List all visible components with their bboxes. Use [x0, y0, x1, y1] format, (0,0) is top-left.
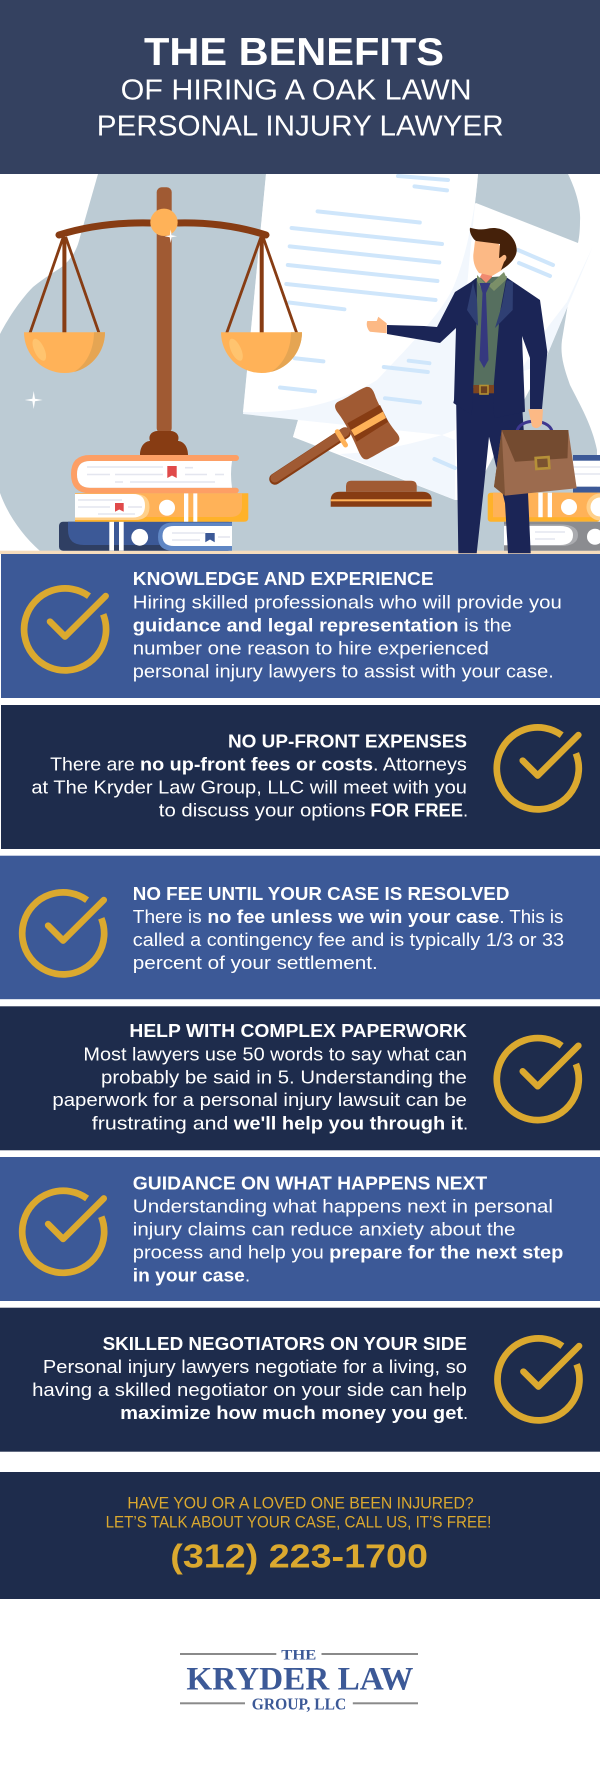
body text: process and help you	[133, 1241, 324, 1262]
stack of books, right	[488, 455, 600, 551]
body text	[52, 1043, 468, 1133]
heading: NO UP-FRONT EXPENSES	[228, 730, 467, 751]
body text	[31, 753, 468, 820]
illustration: lawyer, scales, gavel and books	[0, 174, 600, 554]
body text: no fee unless we win your case	[207, 906, 499, 927]
title: PERSONAL INJURY LAWYER	[97, 111, 504, 143]
outstretched hand	[367, 317, 387, 333]
stack of books, left	[59, 455, 248, 551]
body text	[32, 1356, 468, 1423]
body text: Most lawyers use 50 words to say what can	[83, 1043, 467, 1064]
heading: KNOWLEDGE AND EXPERIENCE	[133, 568, 434, 589]
header banner	[0, 0, 600, 174]
jacket	[387, 277, 547, 418]
body text: having a skilled negotiator on your side can help	[32, 1379, 467, 1400]
lawyer figure	[367, 228, 577, 553]
sparkles	[25, 230, 177, 409]
body text: .	[245, 1264, 250, 1285]
body text: injury claims can reduce anxiety about the	[133, 1218, 516, 1239]
logo: The Kryder Law Group, LLC	[180, 1647, 418, 1713]
panel: help with complex paperwork	[0, 1006, 600, 1150]
body text: There is	[133, 906, 202, 927]
middle orange book	[75, 493, 248, 522]
body text: FOR FREE	[370, 799, 463, 820]
body text: percent of your settlement.	[133, 952, 378, 973]
icon: check circle	[22, 892, 104, 974]
panel: knowledge and experience	[1, 554, 600, 698]
body text: Personal injury lawyers negotiate for a living, so	[43, 1356, 467, 1377]
body text: guidance and legal representation	[133, 614, 459, 635]
body text	[133, 1195, 563, 1285]
panel: no fee until resolved	[0, 856, 600, 999]
body text: paperwork for a personal injury lawsuit can be	[52, 1089, 467, 1110]
heading: SKILLED NEGOTIATORS ON YOUR SIDE	[103, 1333, 467, 1354]
front document	[243, 174, 478, 435]
document text lines	[280, 176, 553, 468]
icon: check circle	[24, 588, 106, 670]
body text: . This is	[499, 906, 563, 927]
face and neck	[480, 268, 492, 283]
body text: probably be said in 5. Understanding the	[101, 1066, 467, 1087]
body text: maximize how much money you get	[120, 1402, 463, 1423]
body text: personal injury lawyers to assist with your case.	[133, 660, 554, 681]
phone number: (312) 223-1700	[170, 1537, 428, 1574]
body text: There are	[50, 753, 135, 774]
call to action text: LET’S TALK ABOUT YOUR CASE, CALL US, IT’S FREE!	[106, 1513, 491, 1531]
title	[97, 31, 504, 143]
heading: HELP WITH COMPLEX PAPERWORK	[129, 1020, 468, 1041]
body text: Hiring skilled professionals who will provide you	[133, 591, 562, 612]
body text: .	[463, 799, 468, 820]
body text: prepare for the next step	[329, 1241, 563, 1262]
trousers	[456, 390, 531, 553]
logo: The Kryder Law Group, LLC: GROUP, LLC	[252, 1694, 346, 1713]
bottom blue book	[59, 522, 232, 551]
background blob	[0, 174, 597, 551]
top orange-cover book	[71, 455, 239, 493]
floor line	[0, 551, 600, 554]
call to action banner	[0, 1472, 600, 1599]
shirt	[473, 276, 507, 388]
body text: at The Kryder Law Group, LLC will meet with you	[31, 776, 467, 797]
call to action text	[106, 1494, 491, 1531]
body text: called a contingency fee and is typically 1/3 or 33	[133, 929, 564, 950]
gavel	[275, 387, 432, 507]
body text: in your case	[133, 1264, 245, 1285]
sound block	[331, 481, 432, 507]
heading: GUIDANCE ON WHAT HAPPENS NEXT	[133, 1172, 488, 1193]
back document	[293, 203, 593, 500]
body text	[133, 906, 564, 973]
scales of justice	[24, 187, 302, 455]
body text: . Attorneys	[373, 753, 467, 774]
collar	[477, 272, 507, 291]
body text: is the	[464, 614, 512, 635]
call to action text: HAVE YOU OR A LOVED ONE BEEN INJURED?	[127, 1494, 474, 1512]
body text: Understanding what happens next in personal	[133, 1195, 553, 1216]
logo: The Kryder Law Group, LLC: THE	[281, 1647, 316, 1663]
icon: check circle	[497, 1038, 579, 1120]
belt	[473, 385, 494, 393]
hair	[470, 228, 517, 270]
briefcase	[494, 409, 577, 496]
title: OF HIRING A OAK LAWN	[121, 74, 472, 106]
body text: number one reason to hire experienced	[133, 637, 489, 658]
panel: skilled negotiators	[0, 1308, 600, 1452]
body text: to discuss your options	[159, 799, 366, 820]
body text: we'll help you through it	[233, 1112, 463, 1133]
lapels	[467, 280, 513, 328]
tie	[480, 283, 491, 368]
title: THE BENEFITS	[144, 31, 444, 74]
icon: check circle	[22, 1191, 104, 1273]
body text	[133, 591, 562, 681]
body text: frustrating and	[92, 1112, 228, 1133]
panel: no up-front expenses	[1, 705, 600, 849]
body text: no up-front fees or costs	[140, 753, 373, 774]
logo: The Kryder Law Group, LLC: KRYDER LAW	[186, 1661, 413, 1697]
panel: guidance on what happens next	[0, 1157, 600, 1301]
body text: .	[463, 1112, 468, 1133]
icon: check circle	[497, 727, 579, 809]
body text: .	[463, 1402, 468, 1423]
icon: check circle	[497, 1338, 579, 1420]
heading: NO FEE UNTIL YOUR CASE IS RESOLVED	[133, 883, 509, 904]
